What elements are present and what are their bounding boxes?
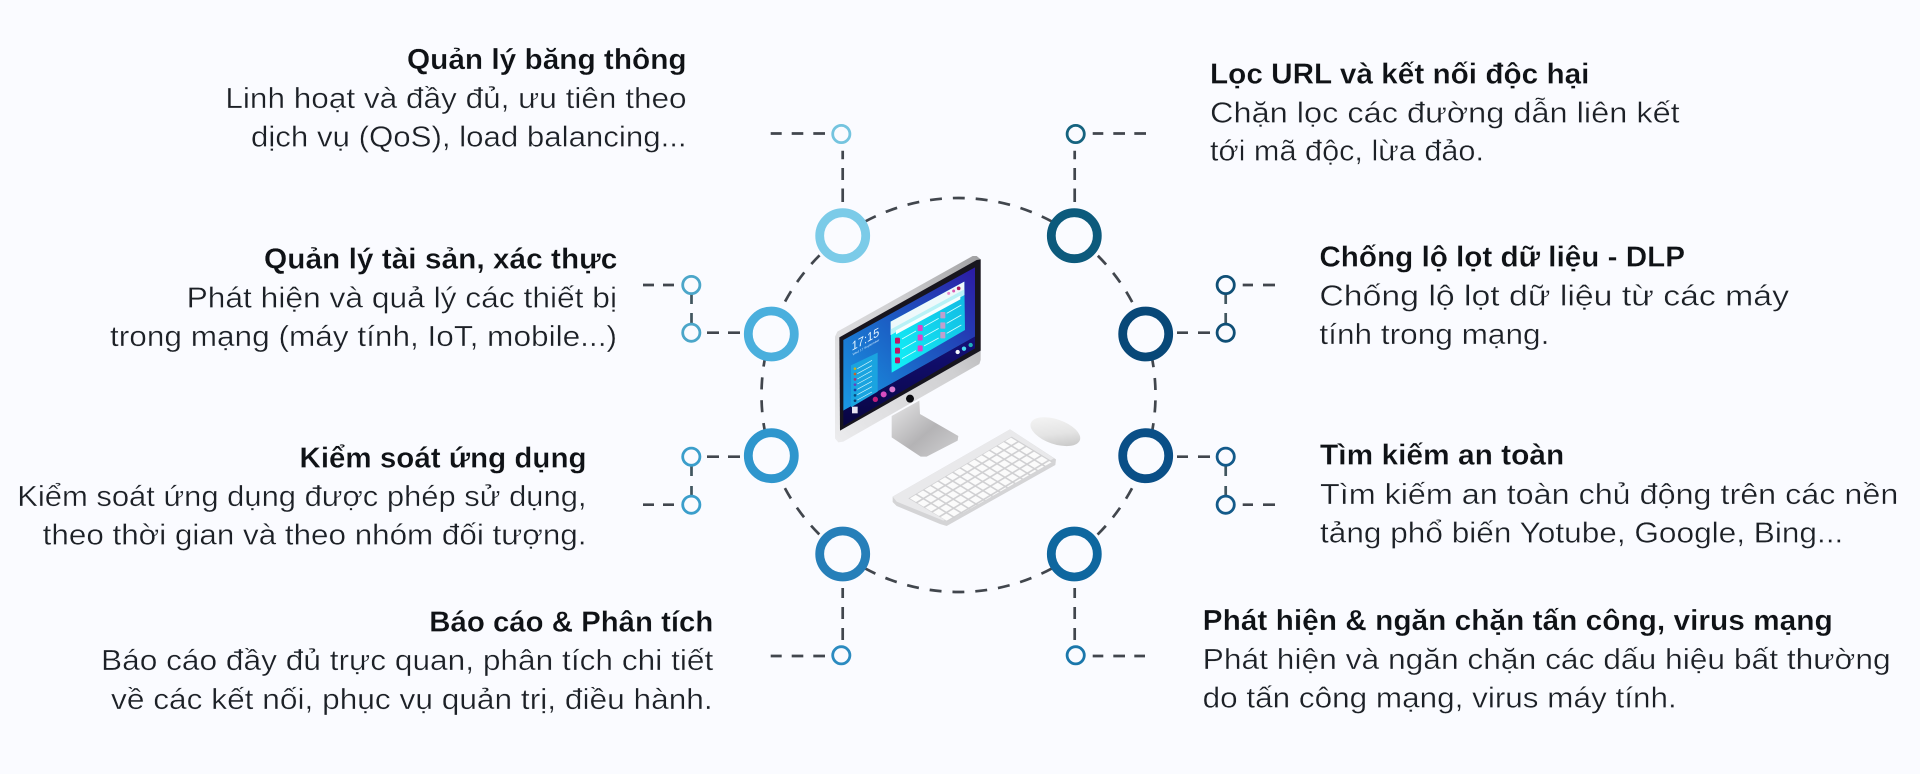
text: Chống lộ lọt dữ liệu - DLP: Chống lộ lọt dữ liệu - DLP	[1319, 242, 1685, 274]
computer illustration	[835, 256, 1084, 526]
connector: Phát hiện & ngăn chặn	[1067, 588, 1145, 664]
node ring: top right	[1051, 213, 1097, 259]
text: Quản lý băng thông: dịch vụ (QoS), load balancing...	[251, 121, 687, 153]
node ring: lower left	[748, 433, 794, 479]
text: Quản lý băng thông: Linh hoạt và đầy đủ, ưu tiên theo	[225, 83, 687, 115]
text: Quản lý tài sản, xác thực: Phát hiện và quả lý các thiết bị	[187, 283, 617, 315]
date: Wed 17 September	[853, 338, 880, 357]
connector: Báo cáo & Phân tích	[771, 588, 850, 664]
node ring: bottom right	[1051, 531, 1097, 577]
text: Tìm kiếm an toàn: tảng phổ biến Yotube, Google, Bing...	[1320, 518, 1843, 550]
text: Lọc URL và kết nối độc hại: tới mã độc, lừa đảo.	[1210, 136, 1484, 168]
monitor frame	[835, 256, 981, 442]
clock: 17:15	[852, 324, 879, 354]
text: Kiểm soát ứng dụng: Kiểm soát ứng dụng	[300, 443, 586, 475]
text: Báo cáo & Phân tích: về các kết nối, phục vụ quản trị, điều hành.	[111, 684, 713, 716]
text: Kiểm soát ứng dụng	[17, 443, 587, 551]
connector: Quản lý băng thông	[771, 125, 850, 202]
dashed circle connecting the nodes	[762, 198, 1156, 592]
monitor stand	[892, 401, 958, 457]
node ring: upper right	[1123, 311, 1169, 357]
text: Tìm kiếm an toàn: Tìm kiếm an toàn chủ động trên các nền	[1320, 479, 1898, 511]
text: Lọc URL và kết nối độc hại: Lọc URL và kết nối độc hại	[1210, 58, 1589, 90]
text: Quản lý băng thông: Quản lý băng thông	[407, 44, 687, 76]
connector: Kiểm soát ứng dụng	[643, 448, 740, 513]
connector: Lọc URL	[1067, 125, 1146, 202]
text: Chống lộ lọt dữ liệu - DLP: tính trong mạng.	[1319, 319, 1549, 351]
text: Tìm kiếm an toàn	[1320, 440, 1898, 550]
text: Quản lý tài sản, xác thực: trong mạng (máy tính, IoT, mobile...)	[110, 321, 617, 353]
monitor bezel	[839, 259, 981, 431]
text: Phát hiện & ngăn chặn tấn công, virus mạng: do tấn công mạng, virus máy tính.	[1203, 682, 1677, 714]
text: Lọc URL và kết nối độc hại: Chặn lọc các đường dẫn liên kết	[1210, 96, 1680, 129]
text: Tìm kiếm an toàn: Tìm kiếm an toàn	[1320, 440, 1564, 472]
mouse	[1027, 412, 1084, 452]
connector: Quản lý tài sản	[643, 276, 740, 341]
connector: Tìm kiếm an toàn	[1177, 448, 1275, 513]
monitor screen	[843, 267, 975, 411]
node ring: bottom left	[820, 531, 866, 577]
text: Phát hiện & ngăn chặn tấn công, virus mạng: Phát hiện và ngăn chặn các dấu hiệu bất thường	[1203, 644, 1891, 676]
text: Quản lý tài sản, xác thực	[110, 243, 617, 353]
text: Kiểm soát ứng dụng: Kiểm soát ứng dụng được phép sử dụng,	[17, 481, 587, 513]
text: Quản lý tài sản, xác thực: Quản lý tài sản, xác thực	[264, 243, 617, 275]
keyboard	[893, 429, 1056, 526]
text: Lọc URL và kết nối độc hại	[1210, 58, 1680, 168]
screen task bar	[843, 337, 975, 426]
node ring: upper left	[748, 311, 794, 357]
text: Phát hiện & ngăn chặn tấn công, virus mạng	[1203, 605, 1891, 714]
text: Chống lộ lọt dữ liệu - DLP: Chống lộ lọt dữ liệu từ các máy	[1319, 281, 1790, 313]
node ring: top left	[820, 213, 866, 259]
node ring: lower right	[1123, 433, 1169, 479]
webcam logo	[906, 395, 914, 403]
text: Báo cáo & Phân tích: Báo cáo đầy đủ trực quan, phân tích chi tiết	[101, 645, 713, 677]
text: Quản lý băng thông	[225, 44, 687, 153]
status dots	[955, 343, 973, 354]
app window	[891, 282, 965, 373]
dock icons	[852, 386, 895, 413]
text: Báo cáo & Phân tích: Báo cáo & Phân tích	[429, 606, 713, 638]
text: Chống lộ lọt dữ liệu - DLP	[1319, 242, 1790, 351]
text: Báo cáo & Phân tích	[101, 606, 713, 716]
left widget panel	[851, 353, 878, 407]
text: Kiểm soát ứng dụng: theo thời gian và theo nhóm đối tượng.	[43, 519, 586, 551]
text: Phát hiện & ngăn chặn tấn công, virus mạng: Phát hiện & ngăn chặn tấn công, virus mạng	[1203, 605, 1833, 637]
connector: Chống lộ lọt dữ liệu	[1177, 276, 1275, 341]
